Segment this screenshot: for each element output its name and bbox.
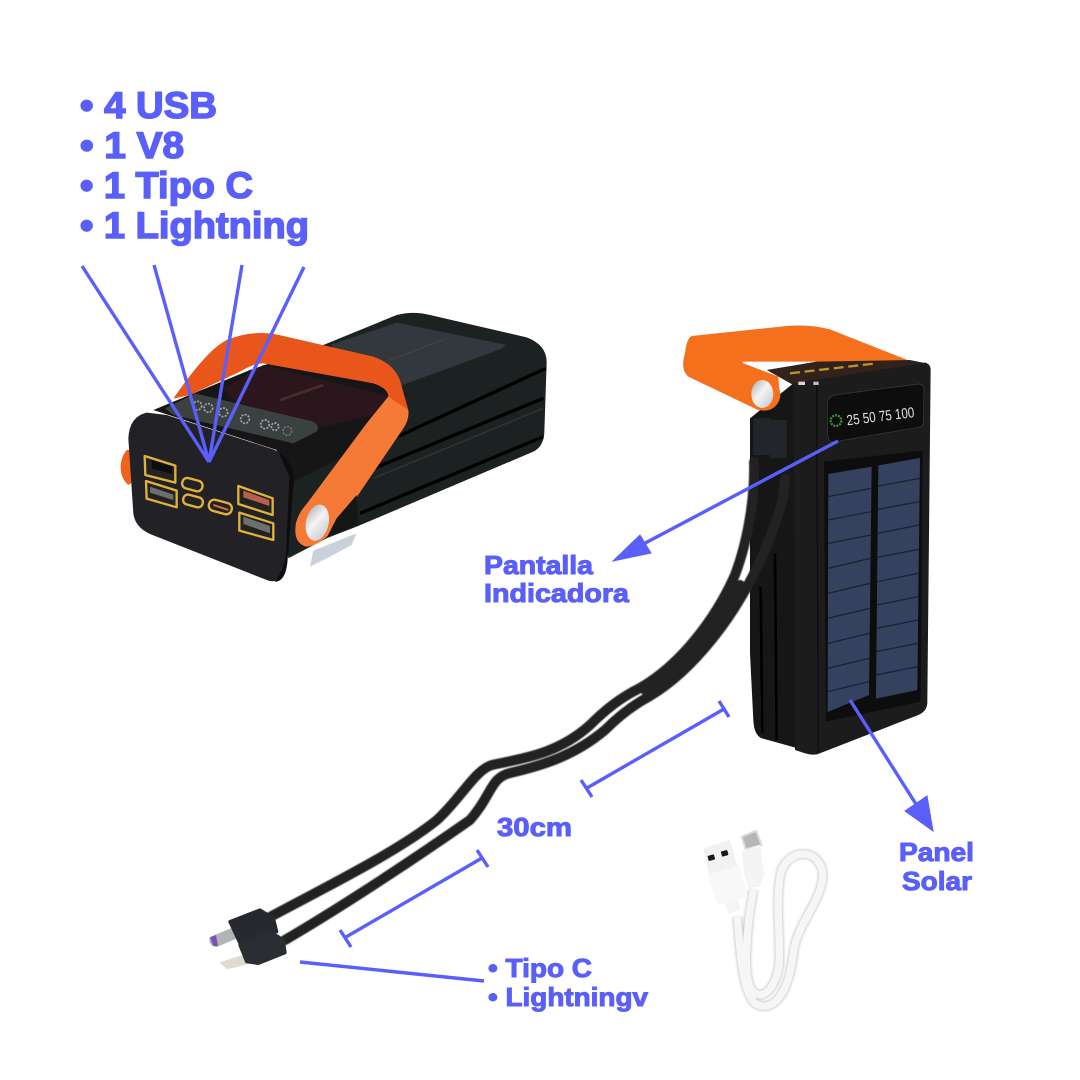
label: cable length: 30cm — [497, 812, 572, 842]
label: pantalla indicadora: Indicadora — [484, 578, 630, 608]
lower dimension bracket — [340, 850, 488, 947]
display — [827, 384, 924, 442]
cable shadow — [737, 854, 823, 1006]
display readout: 25 50 75 100 — [846, 405, 915, 429]
product photo: upright power bank — [683, 325, 931, 755]
body front — [793, 363, 931, 755]
upper dimension bracket — [581, 701, 729, 797]
rivet base — [748, 379, 780, 411]
white USB cable — [703, 831, 823, 1006]
label: cable connectors: • Lightningv — [488, 982, 649, 1012]
rear handle loop tab — [121, 450, 137, 485]
white cable loop — [737, 854, 823, 1006]
label: cable connectors — [488, 953, 649, 1012]
type C plug — [742, 831, 762, 849]
display digits — [193, 401, 292, 435]
product photo: power bank with ports — [121, 313, 547, 582]
label: panel solar — [899, 837, 974, 896]
label: panel solar: Solar — [902, 866, 972, 896]
display strip — [165, 393, 318, 443]
black integrated cables — [270, 462, 785, 940]
silver label — [310, 533, 357, 567]
label: panel solar: Panel — [899, 837, 974, 867]
body back — [750, 383, 820, 754]
display arrow — [613, 441, 838, 561]
ports — [145, 456, 273, 540]
title list: connectors: • 1 Lightning — [80, 205, 309, 246]
top face — [153, 345, 407, 482]
solar panel arrow — [850, 700, 933, 831]
metal rivet — [751, 380, 773, 408]
solar frame — [824, 451, 923, 722]
orange handle — [173, 333, 408, 547]
title list: connectors — [80, 85, 309, 246]
solar top front, reddish reflection — [223, 365, 390, 428]
USB A plug — [703, 840, 738, 878]
connector pointer line — [300, 962, 484, 981]
orange handle — [683, 325, 912, 411]
metal rivet — [302, 502, 332, 543]
cable tips: type C and lightning — [210, 910, 285, 969]
connector pointer lines — [82, 265, 304, 462]
title list: connectors: • 1 V8 — [80, 125, 184, 166]
connector docks — [753, 418, 770, 455]
label: cable connectors: • Tipo C — [488, 953, 592, 983]
body side — [277, 313, 547, 558]
front face — [128, 413, 293, 581]
solar cells — [828, 467, 872, 712]
label: pantalla indicadora: Pantalla — [484, 550, 594, 580]
top edge with glints — [767, 360, 927, 385]
label: pantalla indicadora — [484, 550, 630, 608]
title list: connectors: • 1 Tipo C — [80, 165, 253, 206]
handle dock — [327, 495, 358, 537]
solar top rear — [330, 323, 507, 388]
title list: connectors: • 4 USB — [80, 85, 217, 126]
